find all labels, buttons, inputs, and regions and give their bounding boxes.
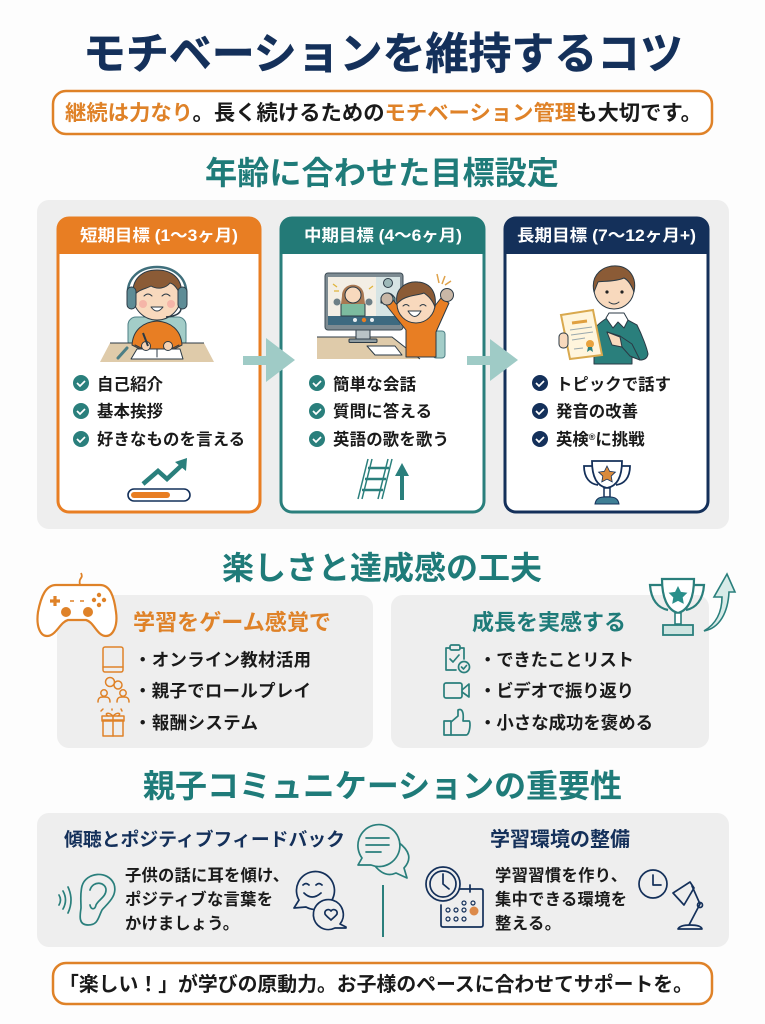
subheading: feeling growth: 成長を実感する	[472, 610, 626, 635]
icon: desk lamp	[673, 882, 702, 929]
icon: growth arrow and progress bar	[128, 458, 190, 501]
icon: game controller	[37, 573, 116, 636]
illustration: child studying with headset	[100, 267, 214, 362]
checklist: long-term: 発音の改善	[556, 402, 638, 421]
panel: game-style learning	[37, 573, 373, 748]
text: listening advice: かけましょう。	[125, 915, 239, 933]
checklist: short-term: 基本挨拶	[97, 402, 164, 421]
text: learning environment advice	[495, 866, 627, 933]
list item: online materials: ・オンライン教材活用	[134, 650, 311, 670]
icon: ladder and up arrow	[358, 459, 409, 500]
icon: video camera	[444, 683, 469, 698]
icon: wall clock	[639, 870, 667, 898]
icon: trophy with star	[584, 461, 630, 504]
list item: video review: ・ビデオで振り返り	[479, 681, 634, 701]
text: listening advice: ポジティブな言葉を	[125, 890, 273, 909]
callout: continuity message	[53, 91, 712, 134]
list item: praise small success: ・小さな成功を褒める	[479, 713, 653, 733]
list item: done list: ・できたことリスト	[479, 650, 634, 670]
checklist: short-term: 好きなものを言える	[97, 431, 245, 449]
card header: long-term: 長期目標 (7〜12ヶ月+)	[517, 226, 696, 245]
panel: goals background	[37, 200, 729, 529]
icon: parent and child talking	[98, 678, 129, 702]
list item: role play: ・親子でロールプレイ	[134, 681, 311, 701]
callout: closing message	[53, 963, 712, 1004]
checklist: long-term	[532, 375, 671, 449]
arrow: short to mid	[243, 338, 295, 382]
text: listening advice	[125, 867, 289, 933]
panel: feeling growth	[391, 574, 735, 748]
icon: ear with sound waves	[59, 874, 115, 925]
title: モチベーションを維持するコツ	[83, 31, 683, 79]
list item: reward system: ・報酬システム	[134, 713, 258, 733]
checklist: mid-term: 質問に答える	[333, 402, 432, 421]
card header: short-term: 短期目標 (1〜3ヶ月)	[80, 226, 238, 245]
checklist: short-term: 自己紹介	[97, 375, 164, 394]
text: learning environment advice: 学習習慣を作り、	[495, 866, 627, 885]
arrow: mid to long	[467, 339, 518, 381]
checklist: mid-term: 簡単な会話	[333, 375, 416, 394]
callout: continuity message: 継続は力なり。長く続けるためのモチベーション管理も大切です。	[65, 102, 702, 125]
checklist: long-term: 英検	[556, 431, 589, 449]
checklist: mid-term	[309, 375, 449, 449]
panel: communication	[37, 813, 729, 947]
icon: trophy and rising arrow	[650, 574, 735, 635]
icon: clock and calendar	[426, 867, 483, 927]
heading: fun and achievement: 楽しさと達成感の工夫	[222, 550, 542, 586]
icon: gift box	[101, 709, 124, 736]
icon: tablet	[103, 647, 123, 672]
text: learning environment advice: 集中できる環境を	[495, 890, 627, 909]
subheading: listening and feedback: 傾聴とポジティブフィードバック	[64, 829, 345, 850]
illustration: student with certificate	[559, 266, 648, 364]
heading: age-appropriate goals: 年齢に合わせた目標設定	[205, 155, 559, 191]
callout: closing message: 「楽しい！」が学びの原動力。お子様のペースに合わせてサポートを。	[59, 973, 693, 996]
illustration: online lesson on monitor and cheering boy	[317, 273, 454, 359]
divider	[382, 885, 384, 937]
checklist: mid-term: 英語の歌を歌う	[333, 430, 449, 449]
icon: thumbs up	[444, 709, 470, 735]
checklist: long-term: ®	[589, 432, 596, 442]
text: listening advice: 子供の話に耳を傾け、	[125, 867, 289, 885]
icon: center conversation bubbles	[358, 825, 409, 878]
panel: short-term goal card	[57, 217, 261, 512]
panel: mid-term goal card	[280, 217, 485, 512]
subheading: learning environment: 学習環境の整備	[490, 828, 630, 851]
checklist: short-term	[73, 375, 245, 449]
text: learning environment advice: 整える。	[495, 915, 561, 933]
checklist: long-term: トピックで話す	[556, 376, 671, 394]
icon: smile and heart speech bubbles	[294, 872, 346, 930]
card header: mid-term: 中期目標 (4〜6ヶ月)	[304, 226, 462, 245]
heading: parent-child communication: 親子コミュニケーションの重要性	[143, 768, 622, 804]
icon: checklist clipboard	[446, 645, 470, 672]
panel: long-term goal card	[504, 217, 709, 512]
checklist: long-term: に挑戦	[595, 430, 645, 449]
subheading: game-style: 学習をゲーム感覚で	[133, 610, 331, 635]
